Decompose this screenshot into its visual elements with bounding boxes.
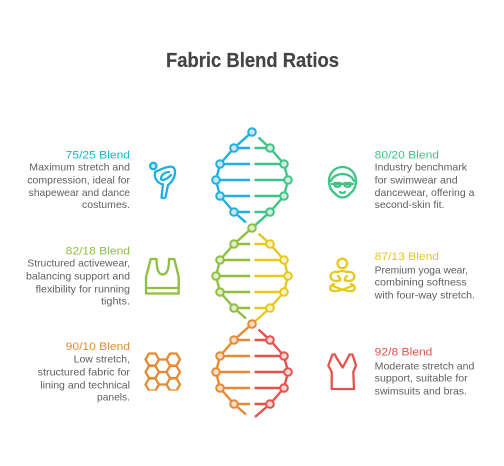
description: 90/10 blend: structured fabric for	[38, 367, 131, 378]
icon: yoga pose	[330, 259, 355, 291]
panel: 82/18 blend	[26, 245, 179, 307]
description: 80/20 blend	[375, 163, 475, 211]
description: 75/25 blend	[27, 163, 131, 211]
icon: swimmer face with goggles	[329, 167, 356, 198]
description: 80/20 blend: second-skin fit.	[375, 200, 444, 211]
description: 80/20 blend: for swimwear and	[375, 175, 458, 186]
description: 80/20 blend: dancewear, offering a	[375, 188, 475, 199]
description: 75/25 blend: compression, ideal for	[27, 175, 131, 186]
description: 87/13 blend: Premium yoga wear,	[375, 265, 468, 276]
panel: 87/13 blend	[330, 251, 475, 302]
heading: 90/10 blend: 90/10 Blend	[66, 341, 130, 353]
description: 92/8 blend	[375, 361, 475, 397]
panel: 80/20 blend	[329, 149, 475, 211]
description: 82/18 blend: balancing support and	[26, 272, 130, 283]
description: 75/25 blend: Maximum stretch and	[29, 163, 130, 174]
description: 82/18 blend: flexibility for running	[36, 284, 130, 295]
description: 92/8 blend: swimsuits and bras.	[375, 386, 467, 397]
description: 90/10 blend	[38, 355, 131, 404]
heading: 80/20 blend: 80/20 Blend	[375, 149, 439, 161]
icon: honeycomb mesh	[146, 354, 180, 390]
panel: 75/25 blend	[27, 149, 175, 211]
heading: 75/25 blend: 75/25 Blend	[66, 149, 130, 161]
description: 80/20 blend: Industry benchmark	[375, 163, 468, 174]
description: 75/25 blend: shapewear and dance	[29, 188, 130, 199]
description: 87/13 blend	[374, 265, 475, 302]
helix segment: 75/25 blue left	[212, 128, 256, 222]
heading: 87/13 blend: 87/13 Blend	[375, 251, 439, 263]
helix segment: 92/8 red right	[254, 330, 292, 417]
helix segment: 87/13 yellow right	[252, 234, 292, 324]
description: 75/25 blend: costumes.	[82, 200, 130, 211]
description: 87/13 blend: with four-way stretch.	[374, 291, 475, 302]
DNA helix diagram	[212, 128, 292, 417]
icon: swimsuit	[328, 354, 356, 389]
heading: 92/8 blend: 92/8 Blend	[375, 347, 432, 359]
description: 87/13 blend: combining softness	[375, 278, 467, 289]
description: 90/10 blend: panels.	[97, 393, 130, 404]
icon: stretching figure	[150, 163, 175, 198]
description: 82/18 blend	[26, 259, 130, 307]
description: 92/8 blend: support, suitable for	[375, 374, 468, 385]
panel: 90/10 blend	[38, 341, 180, 404]
panel: 92/8 blend	[328, 347, 475, 397]
description: 82/18 blend: Structured activewear,	[27, 259, 130, 270]
helix segment: 90/10 orange left	[212, 320, 256, 414]
description: 90/10 blend: lining and technical	[40, 380, 130, 391]
description: 90/10 blend: Low stretch,	[74, 355, 130, 366]
title: Fabric Blend Ratios	[166, 50, 339, 72]
heading: 82/18 blend: 82/18 Blend	[66, 245, 130, 257]
helix segment: 80/20 green right	[252, 138, 292, 228]
helix segment: 82/18 lime left	[212, 224, 256, 318]
description: 82/18 blend: tights.	[101, 296, 130, 307]
description: 92/8 blend: Moderate stretch and	[375, 361, 475, 372]
icon: sports top	[146, 259, 179, 294]
